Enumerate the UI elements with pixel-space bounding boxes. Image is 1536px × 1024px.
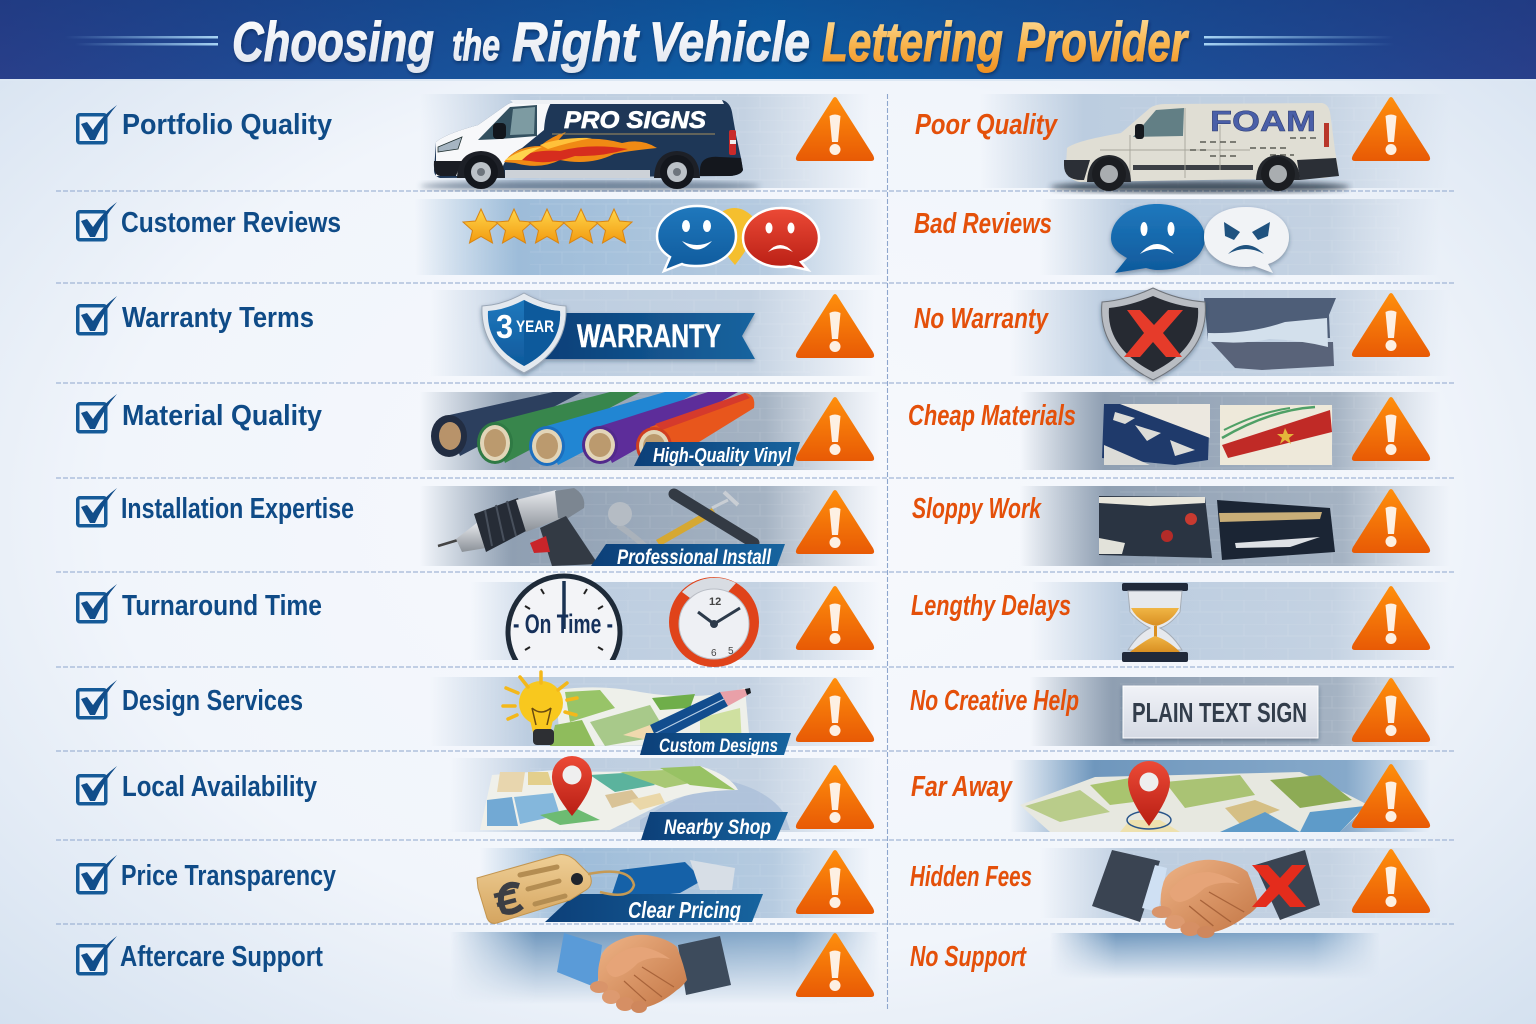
illustration: Pro Signs van: PRO SIGNS [564, 107, 706, 134]
title [232, 10, 1189, 73]
item: Installation Expertise: Installation Expertise [121, 493, 354, 525]
pin [1128, 761, 1170, 826]
clock: On Time [506, 574, 622, 660]
illustration: peeling cheap materials [1102, 404, 1332, 465]
item: Local Availability: Local Availability [122, 771, 317, 803]
banner: Clear Pricing: Clear Pricing [628, 897, 741, 923]
roll: green [477, 392, 640, 464]
illustration: price tag [477, 855, 763, 923]
map [480, 766, 790, 830]
illustration: 3 year warranty shield and ribbon: WARRANTY [577, 318, 721, 354]
clock: red alarm: 5 [728, 646, 734, 657]
item: Aftercare Support: Aftercare Support [120, 941, 323, 973]
item: Price Transparency [78, 855, 336, 893]
illustration: bulb, design sheet and pencil [503, 672, 791, 757]
illustration: five stars [463, 209, 632, 243]
item: Local Availability [78, 766, 317, 804]
left column checklist labels [78, 105, 354, 974]
item: Design Services [78, 680, 303, 718]
item: Portfolio Quality [78, 105, 332, 143]
light bulb [503, 672, 577, 745]
illustration: hidden fees handshake with red X [1092, 850, 1320, 938]
illustration: aftercare handshake [557, 933, 731, 1013]
label: Bad Reviews: Bad Reviews [914, 208, 1052, 240]
clock: red alarm: 12 [709, 596, 721, 608]
illustration: damaged van: FOAM [1210, 106, 1316, 138]
roll: purple [582, 392, 738, 464]
illustration: plain text sign [1123, 686, 1318, 738]
warning triangles: right column [1352, 97, 1430, 913]
item: Material Quality [78, 394, 322, 432]
banner: High-Quality Vinyl: High-Quality Vinyl [653, 445, 791, 467]
item: Turnaround Time: Turnaround Time [122, 590, 322, 622]
illustration: local map with pin [480, 756, 790, 840]
illustration: 3 year warranty shield and ribbon: 3 [496, 308, 513, 345]
roll: navy [431, 392, 582, 457]
illustration: on time clock and red clock [506, 574, 759, 667]
drill [438, 488, 598, 566]
illustration: happy and unhappy speech bubbles [657, 206, 819, 271]
title: Lettering [822, 10, 1003, 73]
item: Installation Expertise [78, 488, 354, 526]
label: Far Away: Far Away [911, 771, 1013, 803]
warning triangles: left column [796, 97, 874, 997]
right column warning labels [908, 109, 1079, 973]
label: Cheap Materials: Cheap Materials [908, 400, 1076, 432]
title: the [452, 21, 500, 70]
roll: blue [529, 392, 698, 466]
item: Warranty Terms: Warranty Terms [122, 302, 314, 334]
shield with red X [1102, 288, 1205, 380]
illustration: plain text sign: PLAIN TEXT SIGN [1132, 697, 1307, 728]
title: Vehicle [649, 10, 810, 73]
label: Hidden Fees: Hidden Fees [910, 861, 1032, 893]
title: Provider [1017, 10, 1189, 73]
item: Aftercare Support [78, 936, 323, 974]
item: Customer Reviews: Customer Reviews [121, 207, 341, 239]
label: No Support: No Support [910, 941, 1027, 973]
torn wrap [1204, 298, 1336, 370]
illustration: 3 year warranty shield and ribbon: YEAR [516, 317, 554, 336]
clock: red alarm: 6 [711, 648, 717, 659]
label: Sloppy Work: Sloppy Work [912, 493, 1042, 525]
illustration: sad and angry bubbles [1111, 204, 1289, 273]
banner: Custom Designs: Custom Designs [659, 736, 778, 757]
item: Portfolio Quality: Portfolio Quality [122, 109, 332, 141]
illustration: 3 year warranty shield and ribbon [482, 293, 755, 373]
banner: High-Quality Vinyl [634, 442, 800, 467]
banner: Professional Install: Professional Install [617, 546, 772, 569]
item: Customer Reviews [78, 202, 341, 240]
label: No Warranty: No Warranty [914, 303, 1049, 335]
euro price tag [477, 855, 634, 923]
illustration: Pro Signs van [420, 100, 760, 191]
label: Poor Quality: Poor Quality [915, 109, 1059, 141]
design sheet [550, 687, 750, 746]
illustration: vinyl rolls [431, 392, 800, 467]
wrench and screwdriver [608, 492, 754, 556]
pencil [623, 688, 751, 742]
label: Lengthy Delays: Lengthy Delays [911, 590, 1071, 622]
header banner [0, 0, 1536, 81]
clock: On Time: - On Time - [513, 609, 613, 639]
illustration: damaged van [1050, 103, 1350, 193]
illustration: broken shield and torn wrap [1102, 288, 1336, 380]
illustration: hourglass [1122, 583, 1188, 662]
banner: Nearby Shop: Nearby Shop [664, 816, 771, 839]
banner: Nearby Shop [641, 812, 788, 840]
illustration: far away map with pin [1020, 761, 1368, 832]
pin [552, 756, 592, 816]
item: Design Services: Design Services [122, 685, 303, 717]
title: Right [512, 10, 640, 73]
item: Price Transparency: Price Transparency [121, 860, 336, 892]
title: Choosing [232, 10, 434, 73]
item: Material Quality: Material Quality [122, 400, 322, 432]
clock: red alarm [669, 577, 759, 667]
roll: orange red [636, 393, 754, 465]
illustration: drill and installation tools [438, 488, 785, 569]
illustration: sloppy patches [1099, 496, 1335, 560]
item: Warranty Terms [78, 296, 314, 334]
item: Turnaround Time [78, 584, 322, 622]
background image strips [415, 94, 1450, 1004]
banner: Custom Designs [640, 733, 791, 757]
label: No Creative Help: No Creative Help [910, 685, 1079, 717]
banner: Clear Pricing [545, 894, 763, 923]
